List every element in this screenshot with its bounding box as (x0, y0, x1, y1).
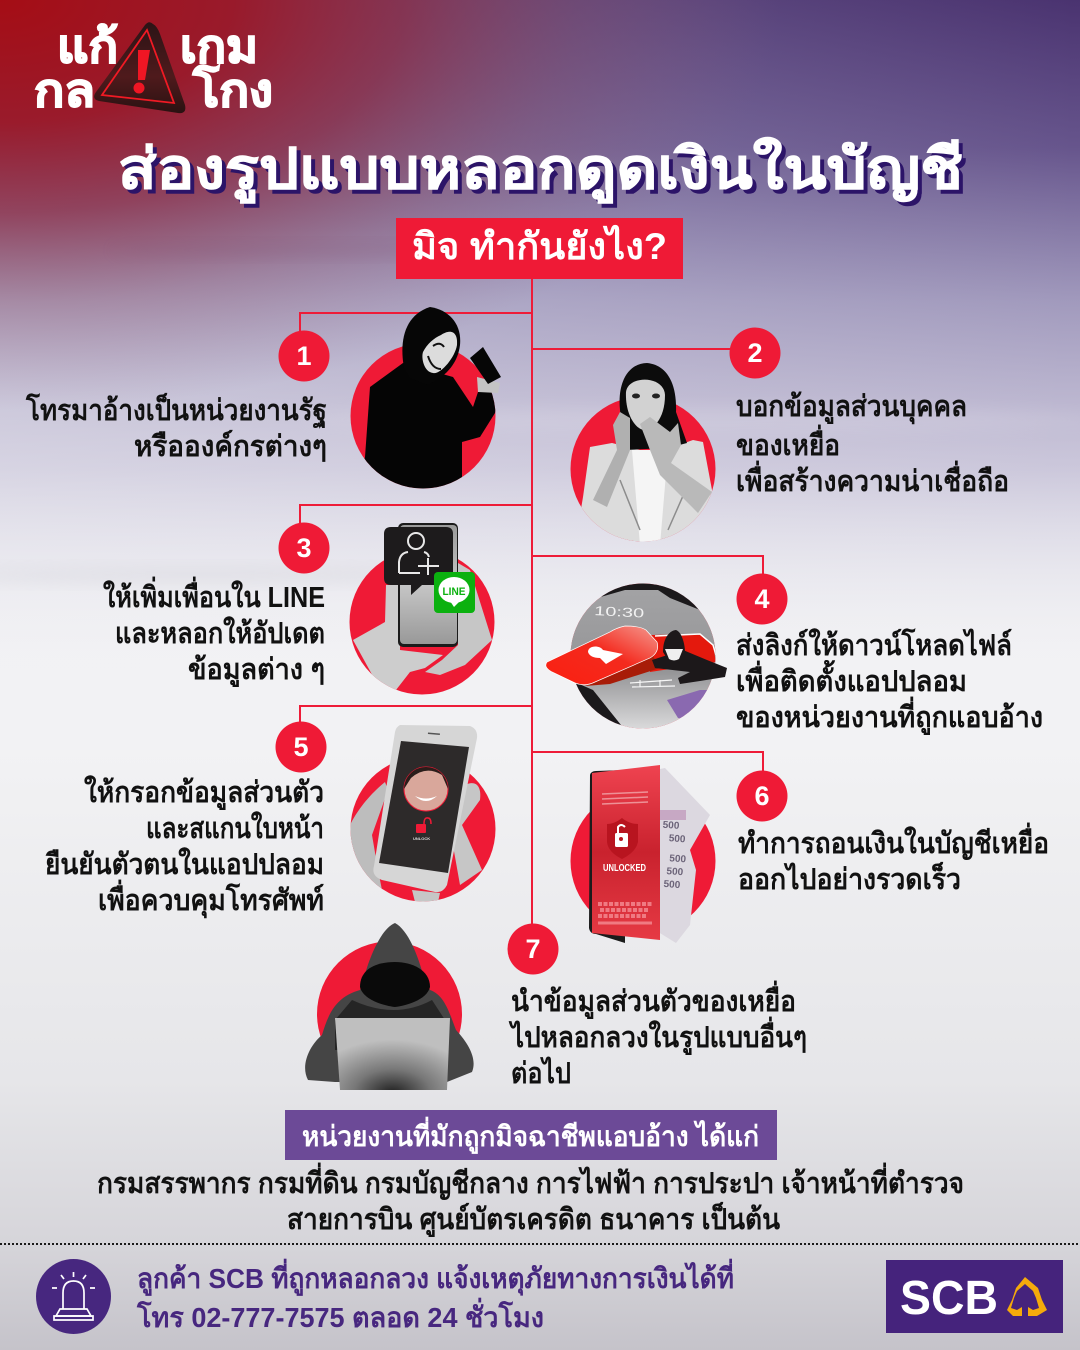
step 3 (103, 522, 494, 694)
illustration: thief behind fake app on phone: 10:30 (594, 603, 645, 621)
text: step 5 (45, 775, 324, 918)
illustration: unlocked phone with banknotes: 500 (662, 820, 680, 832)
illustration: unlocked phone with banknotes: 500 (666, 866, 684, 878)
text: step 2: บอกข้อมูลส่วนบุคคล (736, 391, 967, 424)
illustration: unlocked phone with banknotes: 500 (663, 879, 681, 891)
icon: warning triangle (94, 22, 185, 113)
hotline text: โทร 02-777-7575 ตลอด 24 ชั่วโมง (136, 1297, 544, 1333)
text: step 3 (103, 576, 325, 687)
text: step 5: เพื่อควบคุมโทรศัพท์ (98, 879, 324, 918)
number badge 7: 7 (525, 934, 541, 964)
step 2 (570, 328, 1009, 545)
heading: มิจ ทำกันยังไง: มิจ ทำกันยังไง? (412, 224, 667, 267)
text: step 5: ยืนยันตัวตนในแอปปลอม (45, 847, 324, 881)
step 6 (570, 765, 1049, 943)
illustration: unlocked phone with banknotes: 500 (668, 833, 686, 845)
number badge 7 (508, 924, 558, 974)
SCB logo: SCB (900, 1272, 998, 1325)
text: step 6: ทำการถอนเงินในบัญชีเหยื่อ (738, 822, 1049, 861)
logo: แก้เกมกลโกง: กล (34, 65, 95, 116)
text: step 7: นำข้อมูลส่วนตัวของเหยื่อ (511, 980, 796, 1019)
text: step 2: เพื่อสร้างความน่าเชื่อถือ (736, 460, 1009, 498)
number badge 2 (730, 328, 780, 378)
text: step 5: และสแกนใบหน้า (146, 811, 324, 845)
number badge 2: 2 (747, 338, 763, 368)
step 7 (305, 923, 807, 1090)
text: step 3: และหลอกให้อัปเดต (115, 616, 325, 650)
illustration: masked hacker with phone (350, 307, 501, 500)
text: step 3: ข้อมูลต่าง ๆ (188, 654, 325, 687)
number badge 4: 4 (754, 584, 770, 614)
text: step 1: หรือองค์กรต่างๆ (134, 429, 327, 463)
agencies heading (285, 1110, 777, 1160)
step 4 (546, 574, 1043, 735)
number badge 5 (276, 722, 326, 772)
number badge 5: 5 (293, 732, 309, 762)
text: step 3: ให้เพิ่มเพื่อนใน LINE (103, 576, 325, 614)
agencies heading: หน่วยงานที่มักถูกมิจฉาชีพแอบอ้าง ได้แก่ (302, 1116, 759, 1154)
dotted divider (0, 1243, 1080, 1245)
text: step 4: ส่งลิงก์ให้ดาวน์โหลดไฟล์ (736, 627, 1012, 662)
logo: แก้เกมกลโกง: เกม (180, 21, 258, 72)
text: step 7 (508, 980, 807, 1090)
text: step 4: เพื่อติดตั้งแอปปลอม (736, 659, 967, 698)
text: step 1 (25, 392, 327, 463)
text: step 2 (736, 391, 1009, 498)
logo: แก้เกมกลโกง: โกง (192, 64, 273, 116)
text: step 2: ของเหยื่อ (736, 424, 840, 462)
number badge 3: 3 (296, 533, 312, 563)
illustration: thief behind fake app on phone (546, 578, 727, 730)
illustration: hands holding phone with LINE add friend (350, 523, 494, 694)
agencies list: กรมสรรพากร กรมที่ดิน กรมบัญชีกลาง การไฟฟ้า การประปา เจ้าหน้าที่ตำรวจ (97, 1162, 964, 1201)
step 1 (25, 307, 501, 500)
step 5 (45, 722, 495, 918)
agencies list (97, 1162, 964, 1237)
illustration: hooded hacker at laptop (305, 923, 474, 1090)
illustration: unlocked phone with banknotes (570, 765, 716, 943)
text: step 7: ไปหลอกลวงในรูปแบบอื่นๆ (508, 1016, 807, 1055)
logo: แก้เกมกลโกง: แก้ (57, 21, 118, 72)
text: step 7: ต่อไป (511, 1056, 571, 1090)
icon: alarm siren (36, 1259, 111, 1334)
number badge 6: 6 (754, 781, 770, 811)
logo: แก้เกมกลโกง (34, 21, 273, 116)
agencies list: สายการบิน ศูนย์บัตรเครดิต ธนาคาร เป็นต้น (287, 1201, 780, 1237)
text: step 6 (738, 822, 1049, 896)
text: step 5: ให้กรอกข้อมูลส่วนตัว (84, 775, 324, 810)
illustration: face scan on phone: UNLOCK (413, 836, 430, 841)
illustration: unlocked phone with banknotes: UNLOCKED (603, 863, 646, 874)
number badge 1 (278, 330, 330, 382)
text: step 1: โทรมาอ้างเป็นหน่วยงานรัฐ (25, 392, 327, 429)
SCB logo (886, 1260, 1063, 1333)
number badge 3 (278, 522, 330, 574)
hotline text (136, 1258, 734, 1333)
illustration: face scan on phone (350, 725, 496, 905)
connector lines (300, 278, 763, 930)
number badge 1: 1 (296, 341, 312, 371)
number badge 4 (736, 574, 788, 624)
title: ส่องรูปแบบหลอกดูดเงินในบัญชี (122, 140, 967, 208)
number badge 6 (736, 770, 788, 822)
hotline text: ลูกค้า SCB ที่ถูกหลอกลวง แจ้งเหตุภัยทางการเงินได้ที่ (137, 1258, 734, 1296)
title: ส่องรูปแบบหลอกดูดเงินในบัญชี (118, 136, 963, 204)
text: step 6: ออกไปอย่างรวดเร็ว (738, 861, 961, 896)
illustration: unlocked phone with banknotes: 500 (669, 853, 687, 865)
heading: มิจ ทำกันยังไง (396, 218, 683, 279)
illustration: shocked woman on phone (570, 363, 716, 545)
illustration: hands holding phone with LINE add friend: LINE (442, 586, 466, 598)
text: step 4: ของหน่วยงานที่ถูกแอบอ้าง (736, 696, 1043, 735)
text: step 4 (736, 627, 1043, 735)
